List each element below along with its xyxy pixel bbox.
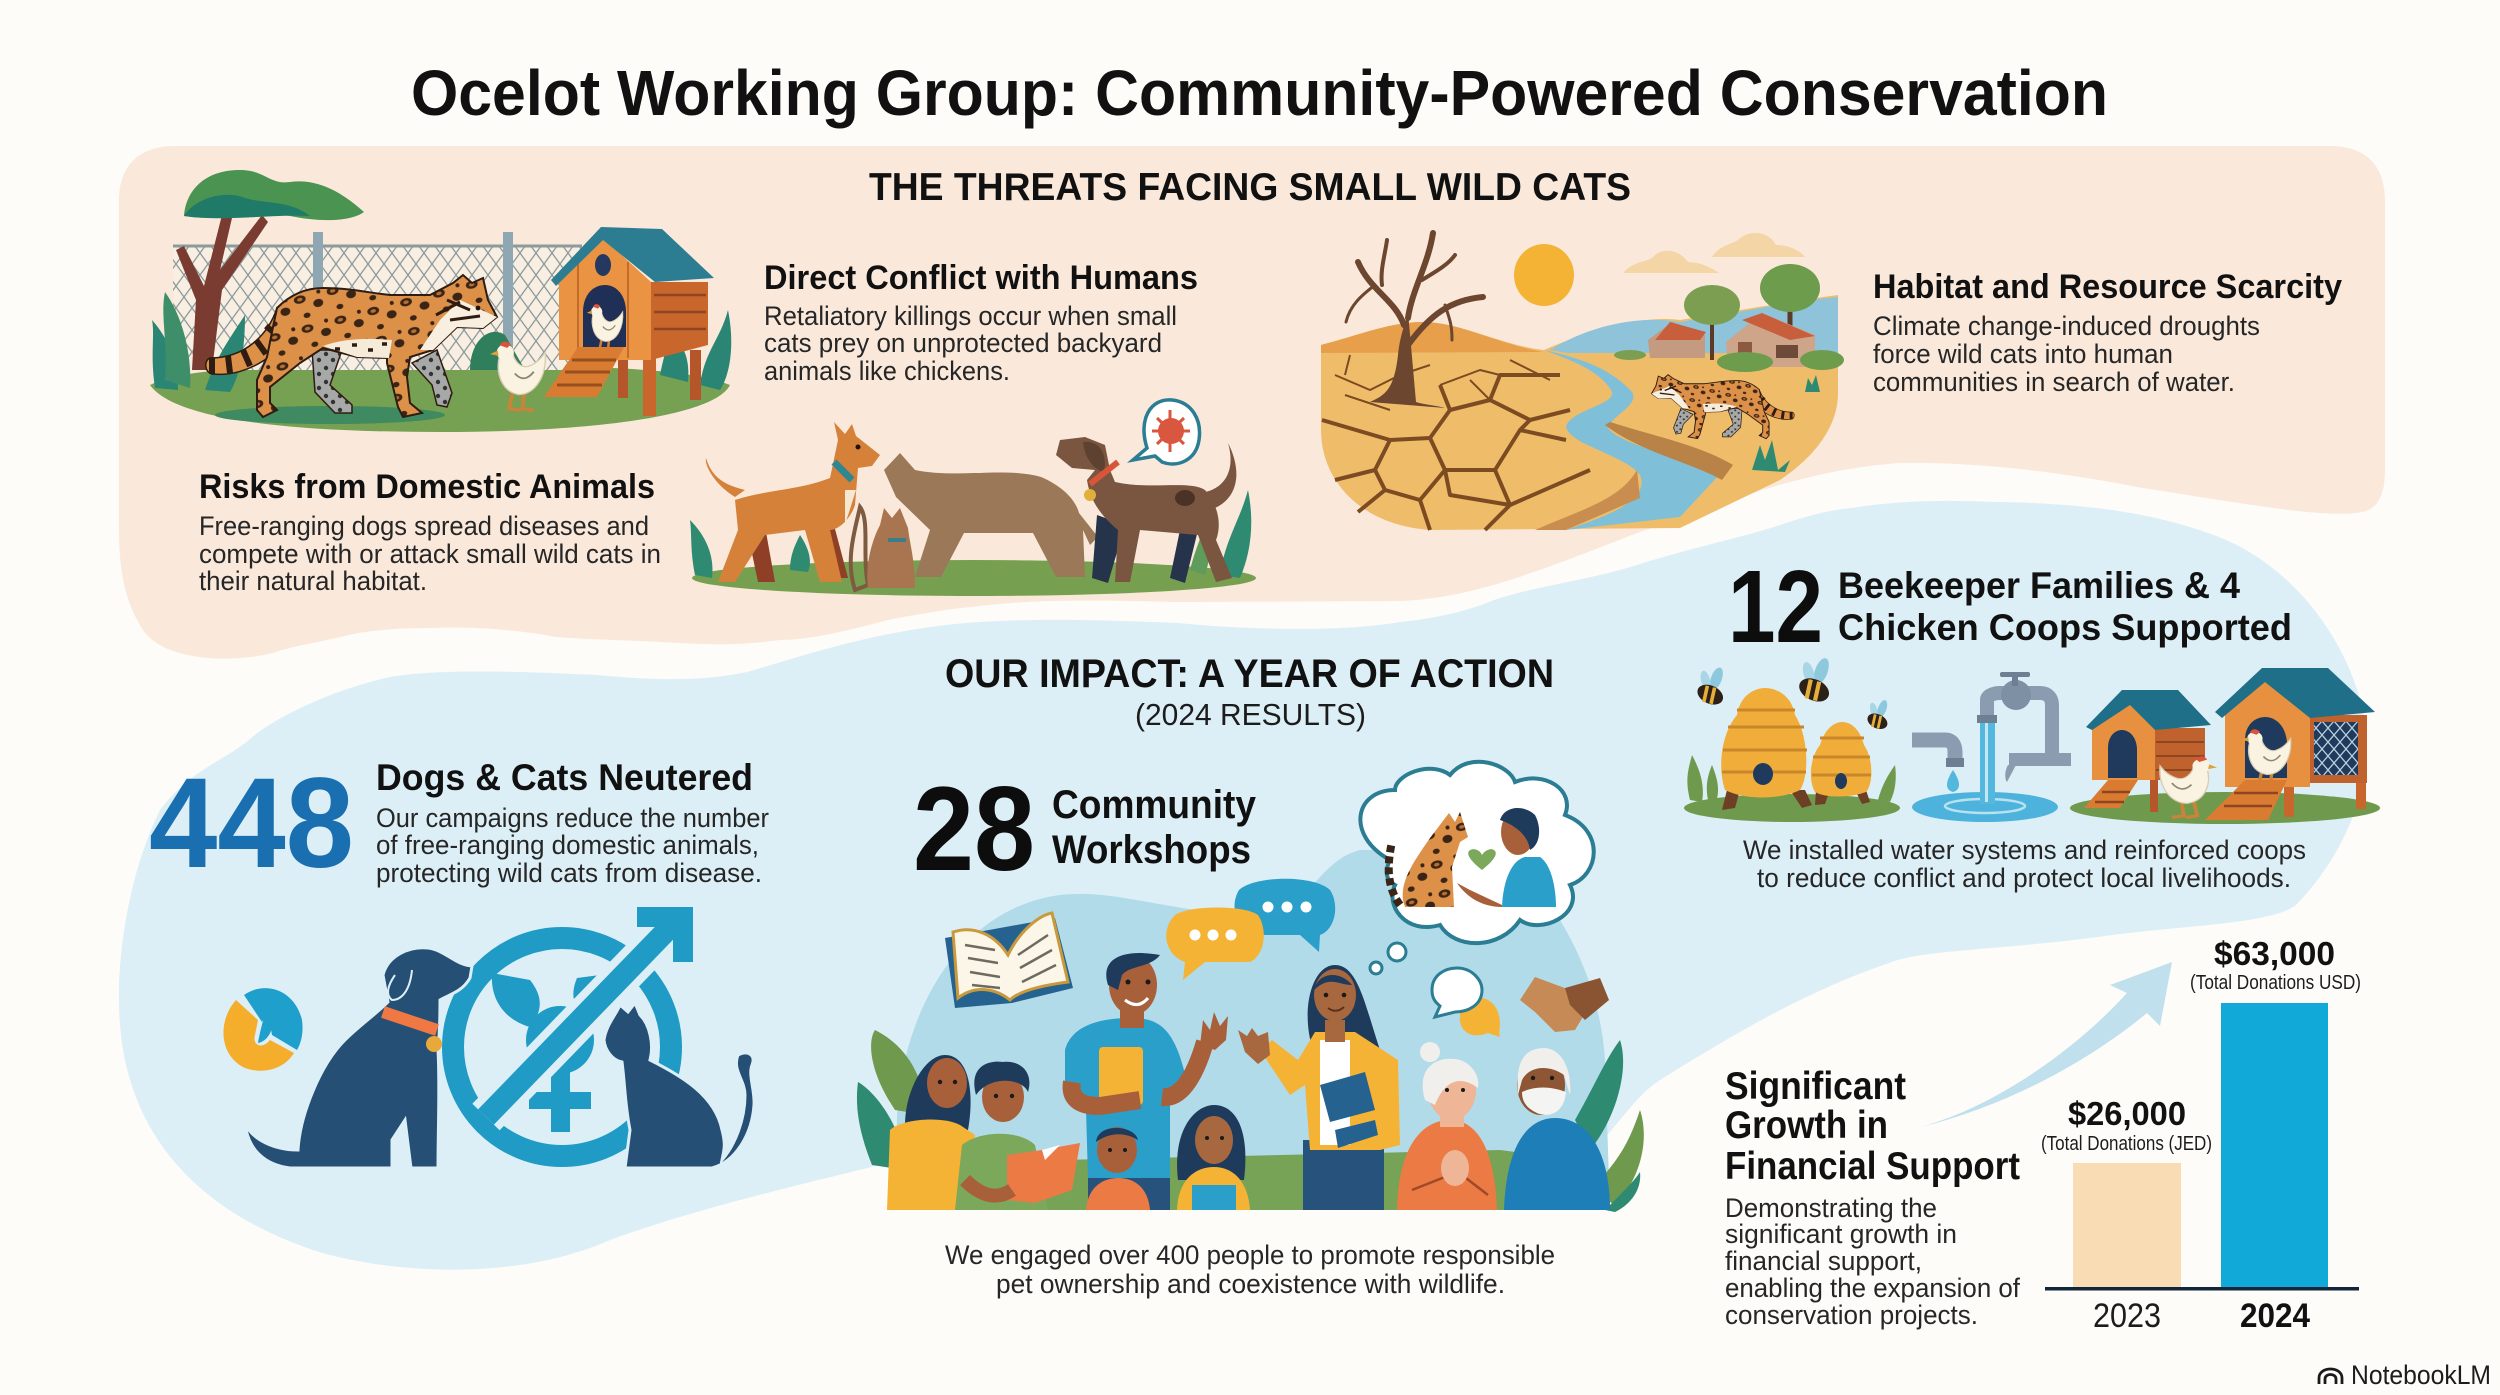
text block: direct conflict with humans: Retaliatory killings occur when small xyxy=(764,301,1177,331)
big brown cat xyxy=(884,453,1098,577)
stat: 12 beekeeper families and 4 chicken coops xyxy=(1728,549,2292,664)
stat: 28 community workshops: 28 xyxy=(913,762,1035,896)
coop large xyxy=(2205,668,2375,820)
title: Ocelot Working Group: Community-Powered Conservation xyxy=(411,57,2108,129)
village xyxy=(1614,264,1844,372)
stat: 448 dogs and cats neutered: 448 xyxy=(149,752,354,895)
river xyxy=(1544,350,1722,530)
heading: impact: OUR IMPACT: A YEAR OF ACTION xyxy=(945,652,1554,696)
dry plants xyxy=(1752,440,1790,472)
sun xyxy=(1514,244,1574,306)
handshake xyxy=(1520,977,1609,1032)
axis labels: 2023 xyxy=(2093,1297,2161,1335)
chicken xyxy=(490,342,545,410)
text block: direct conflict with humans: animals like chickens. xyxy=(764,356,1010,386)
stat: 28 community workshops xyxy=(913,762,1257,896)
text block: water systems description: We installed water systems and reinforced coops xyxy=(1743,835,2306,865)
ocelot xyxy=(206,275,497,417)
text block: risks from domestic animals xyxy=(199,468,661,596)
plants xyxy=(690,490,1251,578)
illustration: community workshop xyxy=(857,762,1644,1212)
tree xyxy=(176,170,364,370)
bar chart: donations xyxy=(2041,935,2361,1335)
seated ocelot xyxy=(1389,812,1468,907)
text block: habitat and resource scarcity: Habitat and Resource Scarcity xyxy=(1873,268,2342,306)
plants xyxy=(152,292,731,392)
stat: 12 beekeeper families and 4 chicken coops: Beekeeper Families & 4 xyxy=(1838,565,2240,606)
value 2023 xyxy=(2041,1095,2212,1155)
ground xyxy=(692,560,1256,596)
illustration: chicken coops xyxy=(2070,668,2380,824)
text block: financial support: financial support, xyxy=(1725,1246,1922,1276)
small leaf badge xyxy=(223,988,303,1071)
value 2024: $63,000 xyxy=(2214,935,2335,972)
small cat xyxy=(851,507,915,590)
text block: financial support: Significant xyxy=(1725,1065,1906,1108)
text block: water systems description: to reduce conflict and protect local livelihoods. xyxy=(1757,863,2291,893)
coop small xyxy=(2084,690,2211,812)
pool xyxy=(1912,792,2058,822)
white gap and male arrow xyxy=(486,925,672,1117)
text block: financial support: Demonstrating the xyxy=(1725,1193,1937,1223)
stat: 12 beekeeper families and 4 chicken coops: Chicken Coops Supported xyxy=(1838,607,2292,648)
dog xyxy=(245,948,472,1168)
text block: direct conflict with humans: Direct Conflict with Humans xyxy=(764,259,1198,297)
open book xyxy=(945,913,1073,1008)
text block: habitat and resource scarcity xyxy=(1873,268,2342,397)
small ocelot xyxy=(1651,375,1794,439)
illustration: ocelot at chicken coop xyxy=(150,170,731,432)
hive small xyxy=(1811,722,1871,805)
panel: threats background xyxy=(119,146,2385,659)
value 2024: (Total Donations USD) xyxy=(2190,972,2361,994)
woman and boy reading xyxy=(887,1055,1080,1210)
text block: direct conflict with humans xyxy=(764,259,1198,386)
panel: impact background xyxy=(119,501,2367,1270)
text block: habitat and resource scarcity: communities in search of water. xyxy=(1873,367,2235,397)
dead tree xyxy=(1346,233,1483,408)
arrow: growth xyxy=(1921,962,2172,1127)
text block: financial support: significant growth in xyxy=(1725,1219,1957,1249)
stat: 28 community workshops: Community xyxy=(1052,783,1257,827)
axis xyxy=(2045,1287,2359,1290)
bees xyxy=(1694,666,1726,708)
chicken right-facing xyxy=(2160,756,2217,817)
hive large xyxy=(1721,688,1812,810)
orange dog xyxy=(706,422,880,582)
text block: financial support: Financial Support xyxy=(1725,1145,2020,1188)
thought bubble xyxy=(1360,762,1594,974)
text block: direct conflict with humans: cats prey on unprotected backyard xyxy=(764,328,1162,358)
illustration: neutering symbol with dog and cat xyxy=(223,907,754,1168)
bar 2023 xyxy=(2073,1163,2181,1288)
illustration: domestic dogs and cats xyxy=(690,400,1256,596)
stat: 448 dogs and cats neutered: Our campaigns reduce the number xyxy=(376,803,769,833)
text block: risks from domestic animals: Free-ranging dogs spread diseases and xyxy=(199,511,649,541)
prohibition ring xyxy=(453,938,671,1156)
illustration: beehives xyxy=(1684,656,1900,822)
ground and hills xyxy=(1321,295,1838,530)
text block: risks from domestic animals: their natural habitat. xyxy=(199,566,427,596)
illustration: drought landscape xyxy=(1321,233,1844,530)
text block: habitat and resource scarcity: Climate change-induced droughts xyxy=(1873,311,2260,341)
text block: water systems description xyxy=(1743,835,2306,893)
ground xyxy=(2070,792,2380,824)
speech bubble with virus xyxy=(1133,400,1200,464)
stat: 28 community workshops: Workshops xyxy=(1052,828,1251,872)
pipes xyxy=(1987,693,2052,755)
man with book xyxy=(1065,953,1228,1210)
heading: impact: (2024 RESULTS) xyxy=(1135,697,1366,732)
value 2024 xyxy=(2190,935,2361,994)
brown dog xyxy=(1056,437,1236,583)
small girl xyxy=(1177,1105,1250,1210)
ground foliage xyxy=(857,1030,1644,1212)
venus symbol xyxy=(492,973,600,1132)
ground xyxy=(150,367,730,432)
heading: impact xyxy=(945,652,1554,732)
grandfather xyxy=(1504,1048,1610,1210)
stat: 448 dogs and cats neutered: Dogs & Cats Neutered xyxy=(376,757,753,798)
stat: 448 dogs and cats neutered: protecting wild cats from disease. xyxy=(376,858,762,888)
heart xyxy=(1468,849,1496,870)
grass xyxy=(1687,755,1896,802)
text block: risks from domestic animals: compete with or attack small wild cats in xyxy=(199,539,661,569)
person in bubble xyxy=(1457,808,1556,907)
value 2023: (Total Donations (JED) xyxy=(2041,1133,2212,1155)
heading: threats: THE THREATS FACING SMALL WILD CATS xyxy=(869,166,1631,209)
stream xyxy=(1980,722,1995,804)
soft blue hill xyxy=(897,850,1610,1210)
text block: financial support xyxy=(1725,1065,2020,1330)
coop xyxy=(544,227,714,416)
text block: habitat and resource scarcity: force wild cats into human xyxy=(1873,339,2173,369)
grandmother xyxy=(1397,1042,1497,1210)
axis labels: 2024 xyxy=(2240,1297,2310,1335)
ground xyxy=(1684,794,1900,822)
logo: NotebookLM: NotebookLM xyxy=(2351,1360,2491,1390)
text block: financial support: Growth in xyxy=(1725,1104,1888,1147)
text block: workshops description xyxy=(945,1240,1555,1299)
fence xyxy=(173,232,582,372)
woman teacher xyxy=(1238,965,1400,1210)
axis labels xyxy=(2093,1297,2310,1335)
small boy xyxy=(1086,1127,1150,1210)
cat xyxy=(604,1003,754,1168)
speech bubbles xyxy=(1166,879,1500,1037)
stat: 448 dogs and cats neutered: of free-ranging domestic animals, xyxy=(376,830,759,860)
text block: financial support: conservation projects. xyxy=(1725,1300,1978,1330)
text block: risks from domestic animals: Risks from Domestic Animals xyxy=(199,468,655,506)
value 2023: $26,000 xyxy=(2068,1095,2186,1132)
stat: 448 dogs and cats neutered xyxy=(149,752,769,895)
ground cracks xyxy=(1322,355,1590,530)
illustration: water tap xyxy=(1912,672,2071,822)
clouds xyxy=(1623,233,1805,273)
bar 2024 xyxy=(2221,1003,2328,1288)
stat: 12 beekeeper families and 4 chicken coops: 12 xyxy=(1728,549,1823,664)
text block: financial support: enabling the expansion of xyxy=(1725,1273,2020,1303)
text block: workshops description: pet ownership and coexistence with wildlife. xyxy=(996,1269,1505,1299)
text block: workshops description: We engaged over 400 people to promote responsible xyxy=(945,1240,1555,1270)
